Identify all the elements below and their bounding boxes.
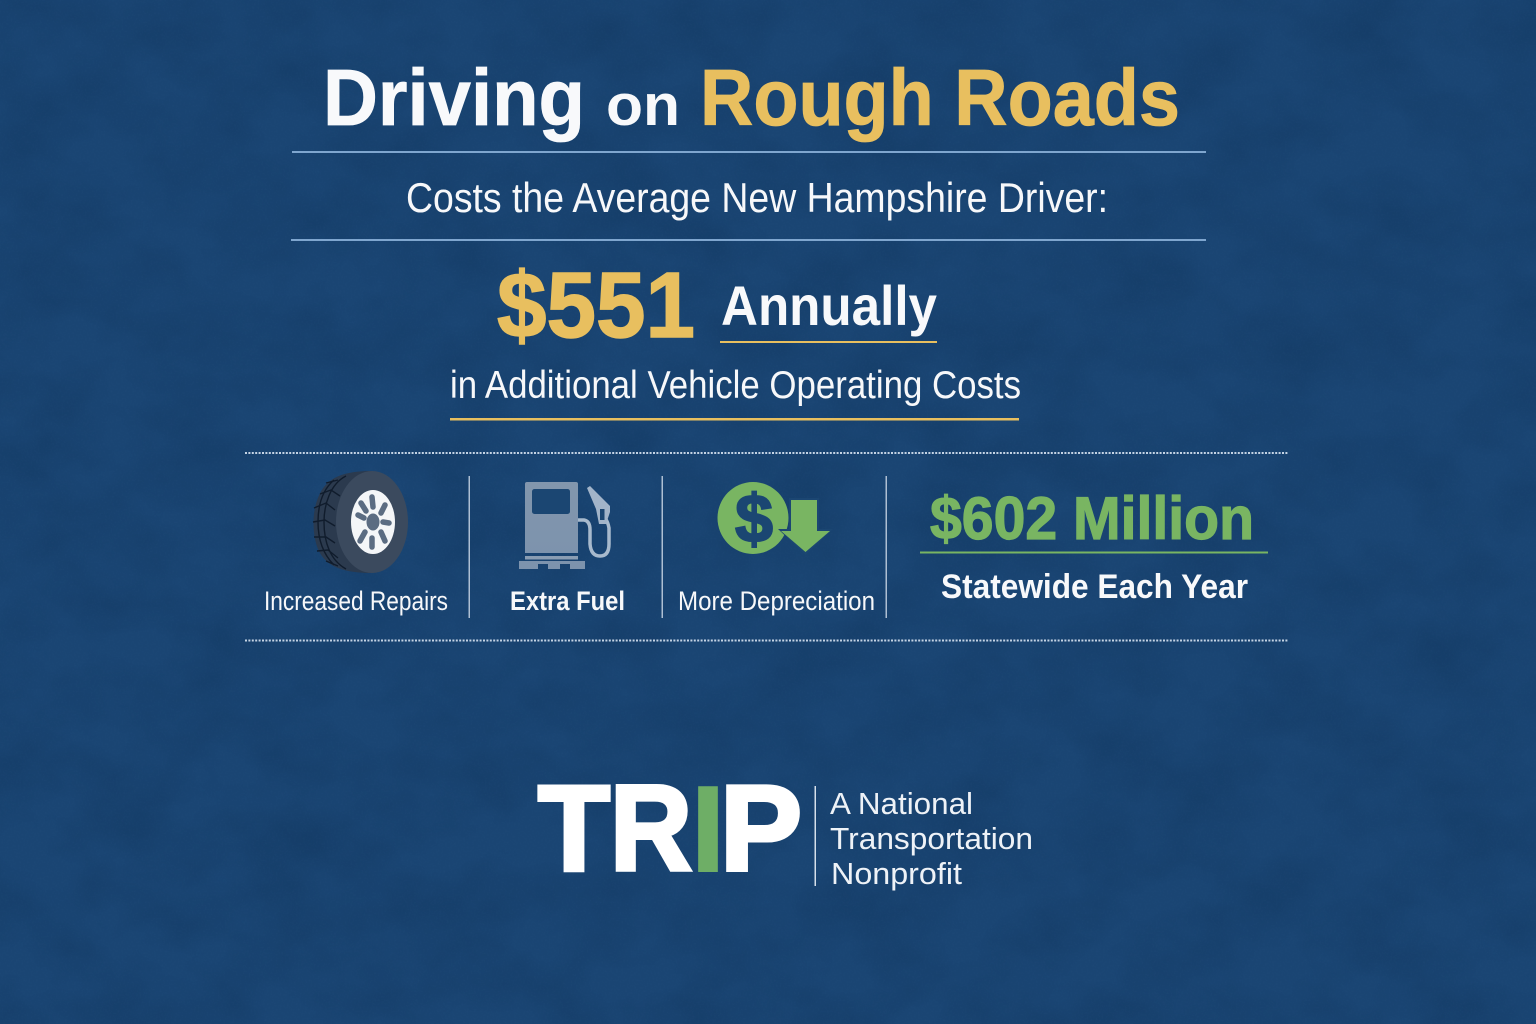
- logo tagline: A National: [830, 786, 973, 821]
- label: increased repairs: Increased Repairs: [264, 586, 448, 616]
- title: Driving: [323, 53, 585, 142]
- title: on: [606, 73, 680, 138]
- logo: TRIP: [538, 760, 802, 897]
- icon: dollar with down arrow: $: [735, 481, 773, 557]
- logo: TRIP: I: [691, 761, 725, 897]
- title: Rough Roads: [700, 53, 1180, 142]
- annual cost figure: [497, 253, 937, 357]
- subtitle: Costs the Average New Hampshire Driver:: [406, 174, 1108, 221]
- logo tagline: Nonprofit: [831, 856, 962, 891]
- logo tagline: Transportation: [830, 821, 1033, 856]
- annual cost figure: Annually: [721, 274, 937, 337]
- logo: TRIP: R: [610, 760, 692, 896]
- annual cost figure: $551: [497, 253, 695, 357]
- label: extra fuel: Extra Fuel: [510, 586, 625, 616]
- icon: fuel pump: [519, 482, 610, 569]
- logo: TRIP: P: [720, 760, 802, 896]
- icon: dollar with down arrow: [718, 481, 833, 557]
- statewide figure: $602 Million: [930, 485, 1254, 552]
- statewide figure: [920, 485, 1268, 606]
- logo tagline: [830, 786, 1033, 891]
- logo: TRIP: T: [538, 760, 610, 896]
- operating costs caption: in Additional Vehicle Operating Costs: [450, 364, 1021, 407]
- label: more depreciation: More Depreciation: [678, 586, 875, 616]
- icon: tire: [313, 471, 408, 573]
- title: [323, 53, 1180, 142]
- statewide figure: Statewide Each Year: [941, 568, 1248, 606]
